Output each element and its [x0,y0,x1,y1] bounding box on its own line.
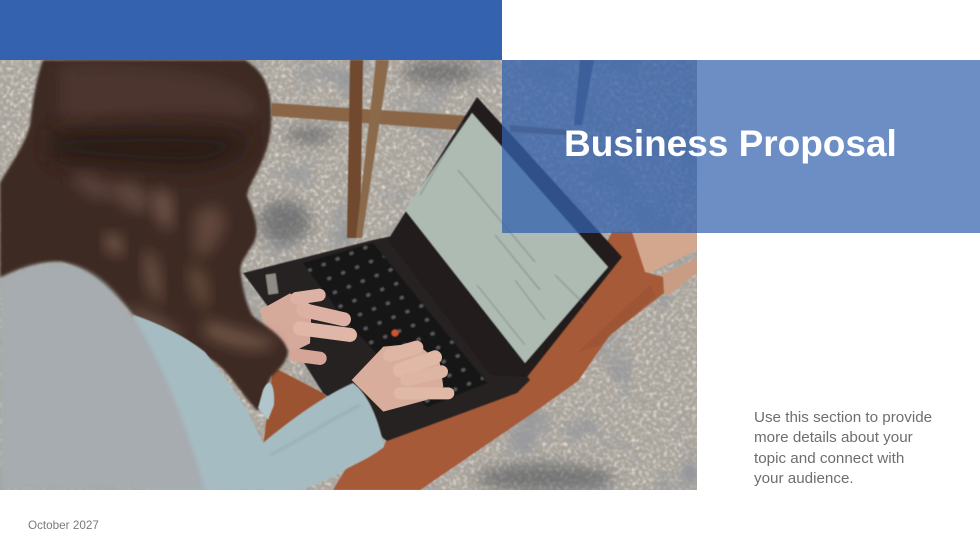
top blue band [0,0,502,60]
date: October 2027 [28,519,99,532]
laptop screen [405,113,608,363]
photo: woman working on laptop on a rug [0,60,697,490]
description text: your audience. [754,470,854,487]
skirt [263,232,664,490]
overlay darker section over the photo [502,60,697,233]
rug [0,60,697,492]
wooden table legs [272,60,594,238]
description text [754,409,932,487]
laptop lid [388,97,622,377]
bare legs [615,232,697,296]
laptop logo [266,273,278,295]
description text: topic and connect with [754,450,904,467]
keyboard red pointer [392,330,398,336]
foreground blurred shoulder [0,263,205,490]
title: Business Proposal [564,123,897,164]
description text: Use this section to provide [754,409,932,426]
hands [260,293,448,412]
title panel: blue translucent overlay [502,60,980,233]
laptop base [243,230,530,441]
laptop [243,97,622,441]
hair [0,60,288,411]
keyboard [303,243,487,407]
description text: more details about your [754,429,913,446]
sweater body and sleeve [133,315,384,490]
